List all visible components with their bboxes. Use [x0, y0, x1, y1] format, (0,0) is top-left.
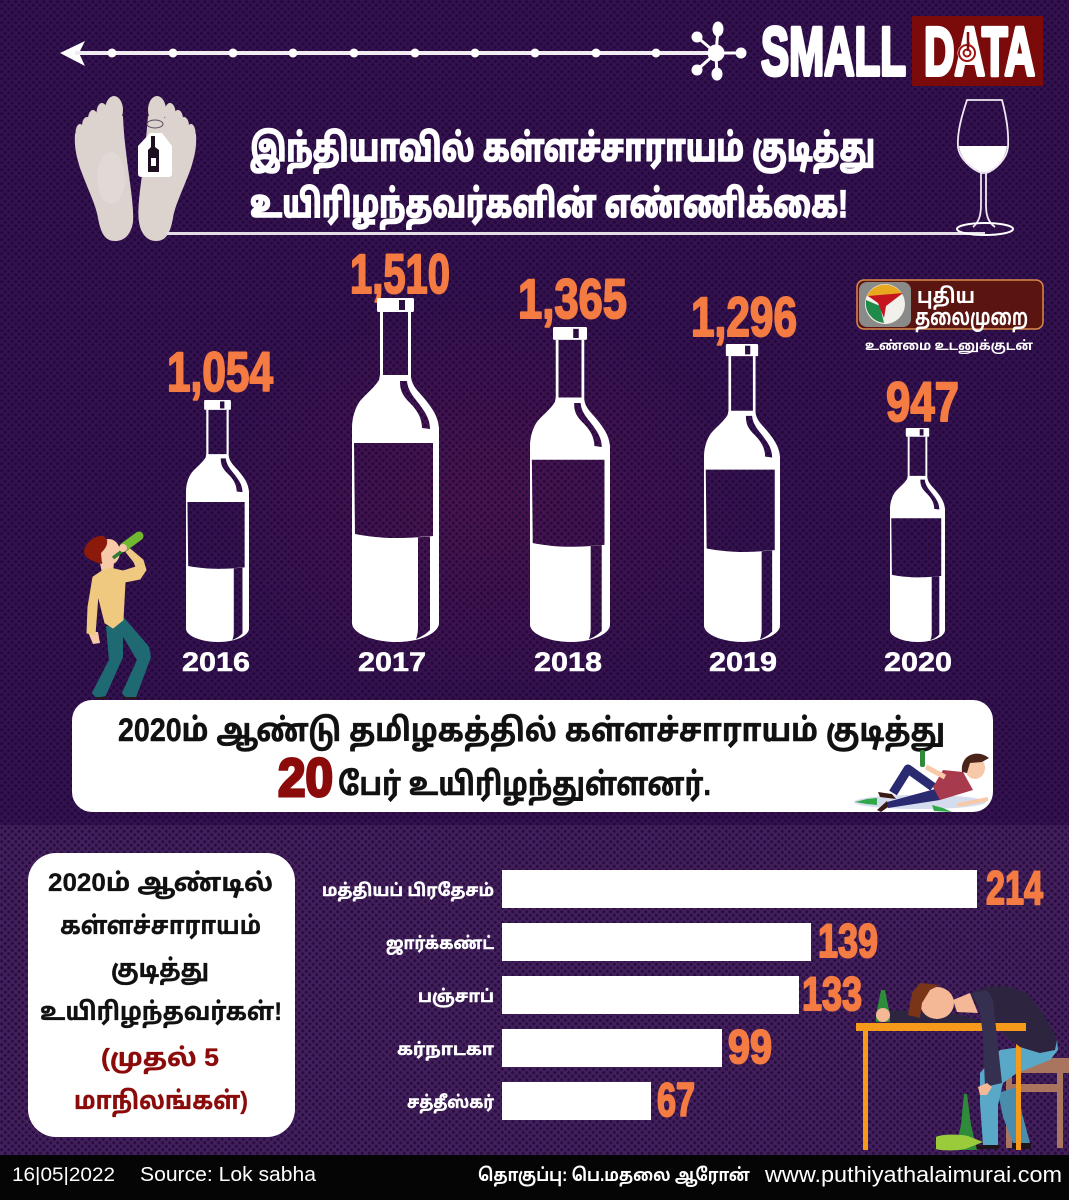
- value 1,054: 1,054: [167, 340, 273, 403]
- bar chart: states: [322, 861, 1043, 1126]
- logo: small data: SMALL: [761, 13, 906, 90]
- illustration: man slumped on table: [856, 983, 1069, 1150]
- bar: madhya pradesh: மத்தியப் பிரதேசம்: [322, 881, 494, 901]
- bar: jharkhand: ஜார்க்கண்ட்: [386, 934, 494, 954]
- bottle 2018: [518, 267, 627, 677]
- title: இந்தியாவில் கள்ளச்சாராயம் குடித்து: [250, 128, 875, 174]
- year: 2018: [534, 647, 602, 677]
- value 947: 947: [886, 370, 959, 433]
- panel: top 5 states: (முதல் 5: [101, 1044, 219, 1074]
- icon: feet with toe tag: [75, 96, 196, 241]
- panel: top 5 states: 2020ம் ஆண்டில்: [48, 869, 273, 900]
- callout: tamil nadu 2020: 2020ம் ஆண்டு தமிழகத்தில் கள்ளச்சாராயம் குடித்து: [118, 712, 945, 752]
- bar: jharkhand: 139: [818, 914, 878, 967]
- bottle icon: [890, 428, 945, 642]
- year: 2019: [709, 647, 777, 677]
- value 1,365: 1,365: [518, 267, 627, 330]
- bottle icon: [704, 344, 780, 642]
- bar: madhya pradesh: [322, 861, 1043, 914]
- bar: punjab: 133: [802, 967, 862, 1020]
- bottle 2017: [350, 242, 450, 677]
- bottle icon: [530, 327, 610, 642]
- bar: karnataka: 99: [728, 1020, 772, 1073]
- logo: puthiya thalaimurai: [857, 280, 1043, 333]
- timeline arrow: [60, 41, 715, 66]
- title underline: [167, 232, 985, 235]
- bar: chhattisgarh: 67: [657, 1073, 695, 1126]
- bottle icon: [186, 400, 249, 642]
- bar: punjab: [418, 967, 862, 1020]
- compiler credit: தொகுப்பு: பெ.மதலை ஆரோன்: [478, 1165, 750, 1187]
- bottle 2019: [691, 285, 797, 677]
- bottle icon: [352, 298, 439, 642]
- callout: tamil nadu 2020: [72, 700, 993, 812]
- panel: top 5 states: குடித்து: [111, 955, 209, 985]
- year: 2016: [182, 647, 250, 677]
- date: 16|05|2022: [12, 1165, 115, 1186]
- website: www.puthiyathalaimurai.com: [764, 1162, 1062, 1187]
- illustration: man drinking: [84, 536, 150, 698]
- tagline: உண்மை உடனுக்குடன்: [865, 338, 1033, 355]
- value 1,296: 1,296: [691, 285, 797, 348]
- year: 2017: [358, 647, 426, 677]
- logo: puthiya thalaimurai: புதிய: [917, 285, 975, 310]
- icon: wine glass: [957, 100, 1013, 235]
- bottle 2016: [167, 340, 273, 677]
- bar: madhya pradesh: 214: [986, 861, 1043, 914]
- title: [250, 128, 875, 229]
- callout: tamil nadu 2020: 20: [278, 748, 333, 808]
- title: உயிரிழந்தவர்களின் எண்ணிக்கை!: [250, 184, 848, 229]
- logo: puthiya thalaimurai: தலைமுறை: [915, 304, 1028, 333]
- value 1,510: 1,510: [350, 242, 450, 305]
- source: Source: Lok sabha: [140, 1164, 317, 1186]
- panel: top 5 states: மாநிலங்கள்): [74, 1087, 248, 1117]
- callout: tamil nadu 2020: பேர் உயிரிழந்துள்ளனர்.: [338, 766, 711, 806]
- panel: top 5 states: [28, 853, 295, 1137]
- bottle 2020: [884, 370, 959, 677]
- bar: karnataka: கர்நாடகா: [397, 1040, 494, 1061]
- bar: chhattisgarh: [407, 1073, 695, 1126]
- year: 2020: [884, 647, 952, 677]
- footer bar: [0, 1155, 1069, 1200]
- icon: network node: [692, 22, 746, 80]
- bar: chhattisgarh: சத்தீஸ்கர்: [407, 1093, 494, 1113]
- illustration: man lying: [854, 750, 989, 812]
- panel: top 5 states: கள்ளச்சாராயம்: [60, 912, 261, 940]
- panel: top 5 states: உயிரிழந்தவர்கள்!: [40, 998, 282, 1028]
- bar: punjab: பஞ்சாப்: [418, 987, 494, 1007]
- bar: karnataka: [397, 1020, 772, 1073]
- bar: jharkhand: [386, 914, 878, 967]
